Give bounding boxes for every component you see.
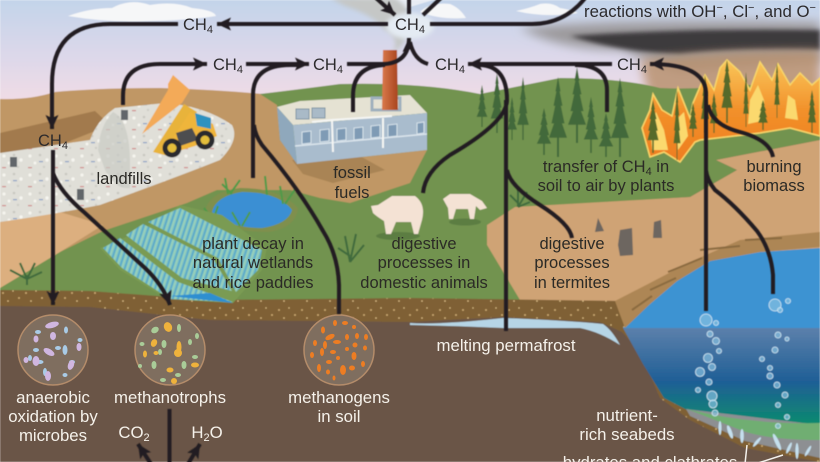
label: nutrient-rich seabeds: nutrient- bbox=[596, 406, 658, 425]
tan wedge left bbox=[0, 212, 103, 288]
conifer forest bbox=[477, 67, 629, 157]
label: CH4 left: 4 bbox=[207, 24, 213, 36]
microbe circle: methanogens bbox=[304, 315, 374, 385]
label: methanotrophs: methanotrophs bbox=[114, 388, 226, 407]
wildfire smoke bbox=[520, 21, 820, 100]
label: CH4 far right: 4 bbox=[641, 64, 647, 76]
label: digestive domestic: domestic animals bbox=[360, 274, 488, 292]
rooftop boxes bbox=[296, 108, 325, 119]
label: fossil fuels: fuels bbox=[335, 184, 369, 202]
arrow: methanogens up bbox=[254, 125, 339, 314]
reactions text: , and O bbox=[754, 2, 810, 21]
label: CO2: CO bbox=[118, 423, 144, 442]
arrow: top CH4 to left CH4 bbox=[217, 22, 388, 26]
factory left wall bbox=[277, 107, 297, 164]
factory roof bbox=[277, 95, 427, 125]
arrow: permafrost up bbox=[504, 100, 508, 331]
arrow: termites up bbox=[507, 170, 572, 238]
arrow: incoming from upper left to top CH4 bbox=[376, 0, 395, 15]
label: anaerobic oxidation: anaerobic bbox=[16, 388, 90, 407]
arrow: CH4 to top CH4 bbox=[347, 38, 409, 64]
label: CH4 landfill: CH bbox=[213, 56, 237, 74]
factory front wall bbox=[293, 113, 427, 164]
smoke plume bbox=[330, 0, 410, 52]
label: digestive termites: digestive bbox=[539, 235, 605, 253]
landfill mound bbox=[98, 112, 130, 188]
label: CH4 top: CH bbox=[395, 16, 419, 34]
label: digestive domestic: processes in bbox=[378, 254, 470, 272]
arrow: landfills to CH4 bbox=[123, 64, 207, 105]
CH4 glow bbox=[386, 13, 434, 39]
white pipes bbox=[312, 116, 392, 152]
tan soil patch right bbox=[487, 140, 820, 306]
label: digestive termites: in termites bbox=[534, 274, 610, 292]
label: nutrient-rich seabeds: rich seabeds bbox=[579, 425, 675, 444]
arrow: landfill CH4 to methanotrophs bbox=[53, 173, 170, 305]
eroded lake shore bbox=[615, 232, 820, 328]
dark cliff behind landfill bbox=[0, 111, 110, 155]
label: burning biomass: burning bbox=[746, 158, 802, 176]
label: CH4 center: CH bbox=[313, 56, 337, 74]
reactions text: − bbox=[748, 2, 754, 14]
deep ocean water bbox=[623, 328, 820, 425]
label: methanogens: methanogens bbox=[288, 388, 390, 407]
hydrate crystals bbox=[718, 421, 812, 459]
dark scene labels bbox=[96, 158, 805, 292]
label: CH4 landfill: 4 bbox=[237, 64, 243, 76]
arrow: to CO2 bbox=[138, 444, 151, 462]
label: CH4 center: 4 bbox=[337, 64, 343, 76]
forest fire bbox=[642, 60, 820, 162]
arrow: top CH4 upper right bbox=[423, 0, 442, 15]
dead stumps bbox=[595, 218, 662, 256]
arrow: landfill CH4 down to anaerobic microbes bbox=[51, 150, 55, 305]
chimney bbox=[372, 50, 400, 110]
label: CH4 left: CH bbox=[183, 16, 207, 34]
label: CO2: 2 bbox=[144, 432, 150, 444]
label: plant decay: and rice paddies bbox=[192, 274, 314, 292]
icon: bubbles bbox=[696, 298, 790, 428]
arrow: domestic animals up bbox=[423, 65, 507, 193]
soil cross-section bbox=[0, 292, 820, 462]
arrow: plants up bbox=[575, 65, 607, 112]
arrow: top CH4 upward bbox=[407, 0, 411, 14]
fossil fuel ground patch bbox=[292, 156, 385, 183]
factory windows bbox=[302, 122, 424, 144]
CH4 labels bbox=[38, 16, 647, 152]
reactions text: , Cl bbox=[723, 2, 748, 21]
label: H2O: 2 bbox=[203, 432, 210, 444]
label: digestive domestic: digestive bbox=[391, 235, 457, 253]
gas hydrate seabed layer bbox=[686, 409, 820, 458]
pond bbox=[204, 176, 298, 232]
hydrate pointer lines bbox=[745, 445, 783, 462]
label: transfer by plants: 4 bbox=[646, 166, 652, 178]
icon: pig small bbox=[443, 194, 487, 226]
label: transfer by plants: soil to air by plants bbox=[538, 177, 674, 195]
label: transfer by plants: transfer of CH bbox=[543, 158, 646, 176]
label: burning biomass: biomass bbox=[743, 177, 805, 195]
arrow: to H2O bbox=[188, 444, 200, 462]
label: fossil fuels: fossil bbox=[333, 164, 371, 182]
label: H2O: O bbox=[210, 423, 223, 442]
reactions text: − bbox=[716, 2, 723, 14]
arrow: water up to far CH4 bbox=[650, 64, 706, 311]
label: CH4 top: 4 bbox=[419, 24, 425, 36]
label: anaerobic oxidation: microbes bbox=[19, 426, 87, 445]
reactions text: reactions with OH bbox=[584, 2, 716, 21]
arrow: wetlands up bbox=[253, 65, 300, 178]
label: melting permafrost: melting permafrost bbox=[437, 336, 576, 355]
tufts of grass bbox=[10, 188, 530, 285]
topsoil band bbox=[0, 290, 820, 462]
microbe circle: anaerobic oxidation bbox=[18, 315, 88, 385]
arrow: left CH4 down to landfill CH4 bbox=[52, 24, 178, 129]
clouds bbox=[68, 0, 578, 21]
green hills bbox=[0, 78, 820, 306]
arrow: burning biomass up bbox=[708, 105, 773, 157]
tan ground bbox=[0, 88, 430, 300]
melting permafrost ice bbox=[410, 318, 620, 345]
lake surface bbox=[623, 248, 820, 328]
label: plant decay: plant decay in bbox=[202, 235, 304, 253]
white soil labels bbox=[8, 336, 737, 462]
label: digestive termites: processes bbox=[534, 254, 610, 272]
vent pipes bbox=[10, 110, 128, 200]
arrow: methanotroph stem bbox=[168, 409, 172, 462]
arrow: CH4 to CH4 bbox=[246, 62, 309, 66]
label: CH4 right: 4 bbox=[459, 64, 465, 76]
arrow: lake bubbles up bbox=[706, 170, 773, 294]
icon: dump truck bbox=[142, 75, 217, 158]
label: anaerobic oxidation: oxidation by bbox=[8, 407, 98, 426]
factory bbox=[277, 95, 427, 164]
microbe circle: methanotrophs bbox=[135, 315, 205, 385]
arrow: far CH4 to mid CH4 bbox=[468, 62, 612, 66]
green seabed bbox=[687, 409, 820, 440]
label: plant decay: natural wetlands bbox=[193, 254, 313, 272]
label: transfer by plants: in bbox=[652, 158, 669, 176]
arrow: fossil fuels up bbox=[353, 65, 385, 112]
sky bbox=[0, 0, 820, 110]
label: CH4 landfill left: CH bbox=[38, 132, 62, 150]
landfill bbox=[0, 103, 234, 222]
icon: pig large bbox=[371, 196, 423, 240]
arrow: right CH4 up to top CH4 bbox=[410, 42, 428, 64]
reactions text: − bbox=[810, 2, 816, 14]
label: CH4 right: CH bbox=[435, 56, 459, 74]
label: CH4 landfill left: 4 bbox=[62, 140, 68, 152]
label: methanogens: in soil bbox=[318, 407, 360, 426]
rice paddies bbox=[100, 205, 267, 303]
label: H2O: H bbox=[191, 423, 203, 442]
label: CH4 far right: CH bbox=[617, 56, 641, 74]
label: landfills: landfills bbox=[96, 170, 152, 188]
arrow: top CH4 to reactions bbox=[430, 0, 586, 24]
